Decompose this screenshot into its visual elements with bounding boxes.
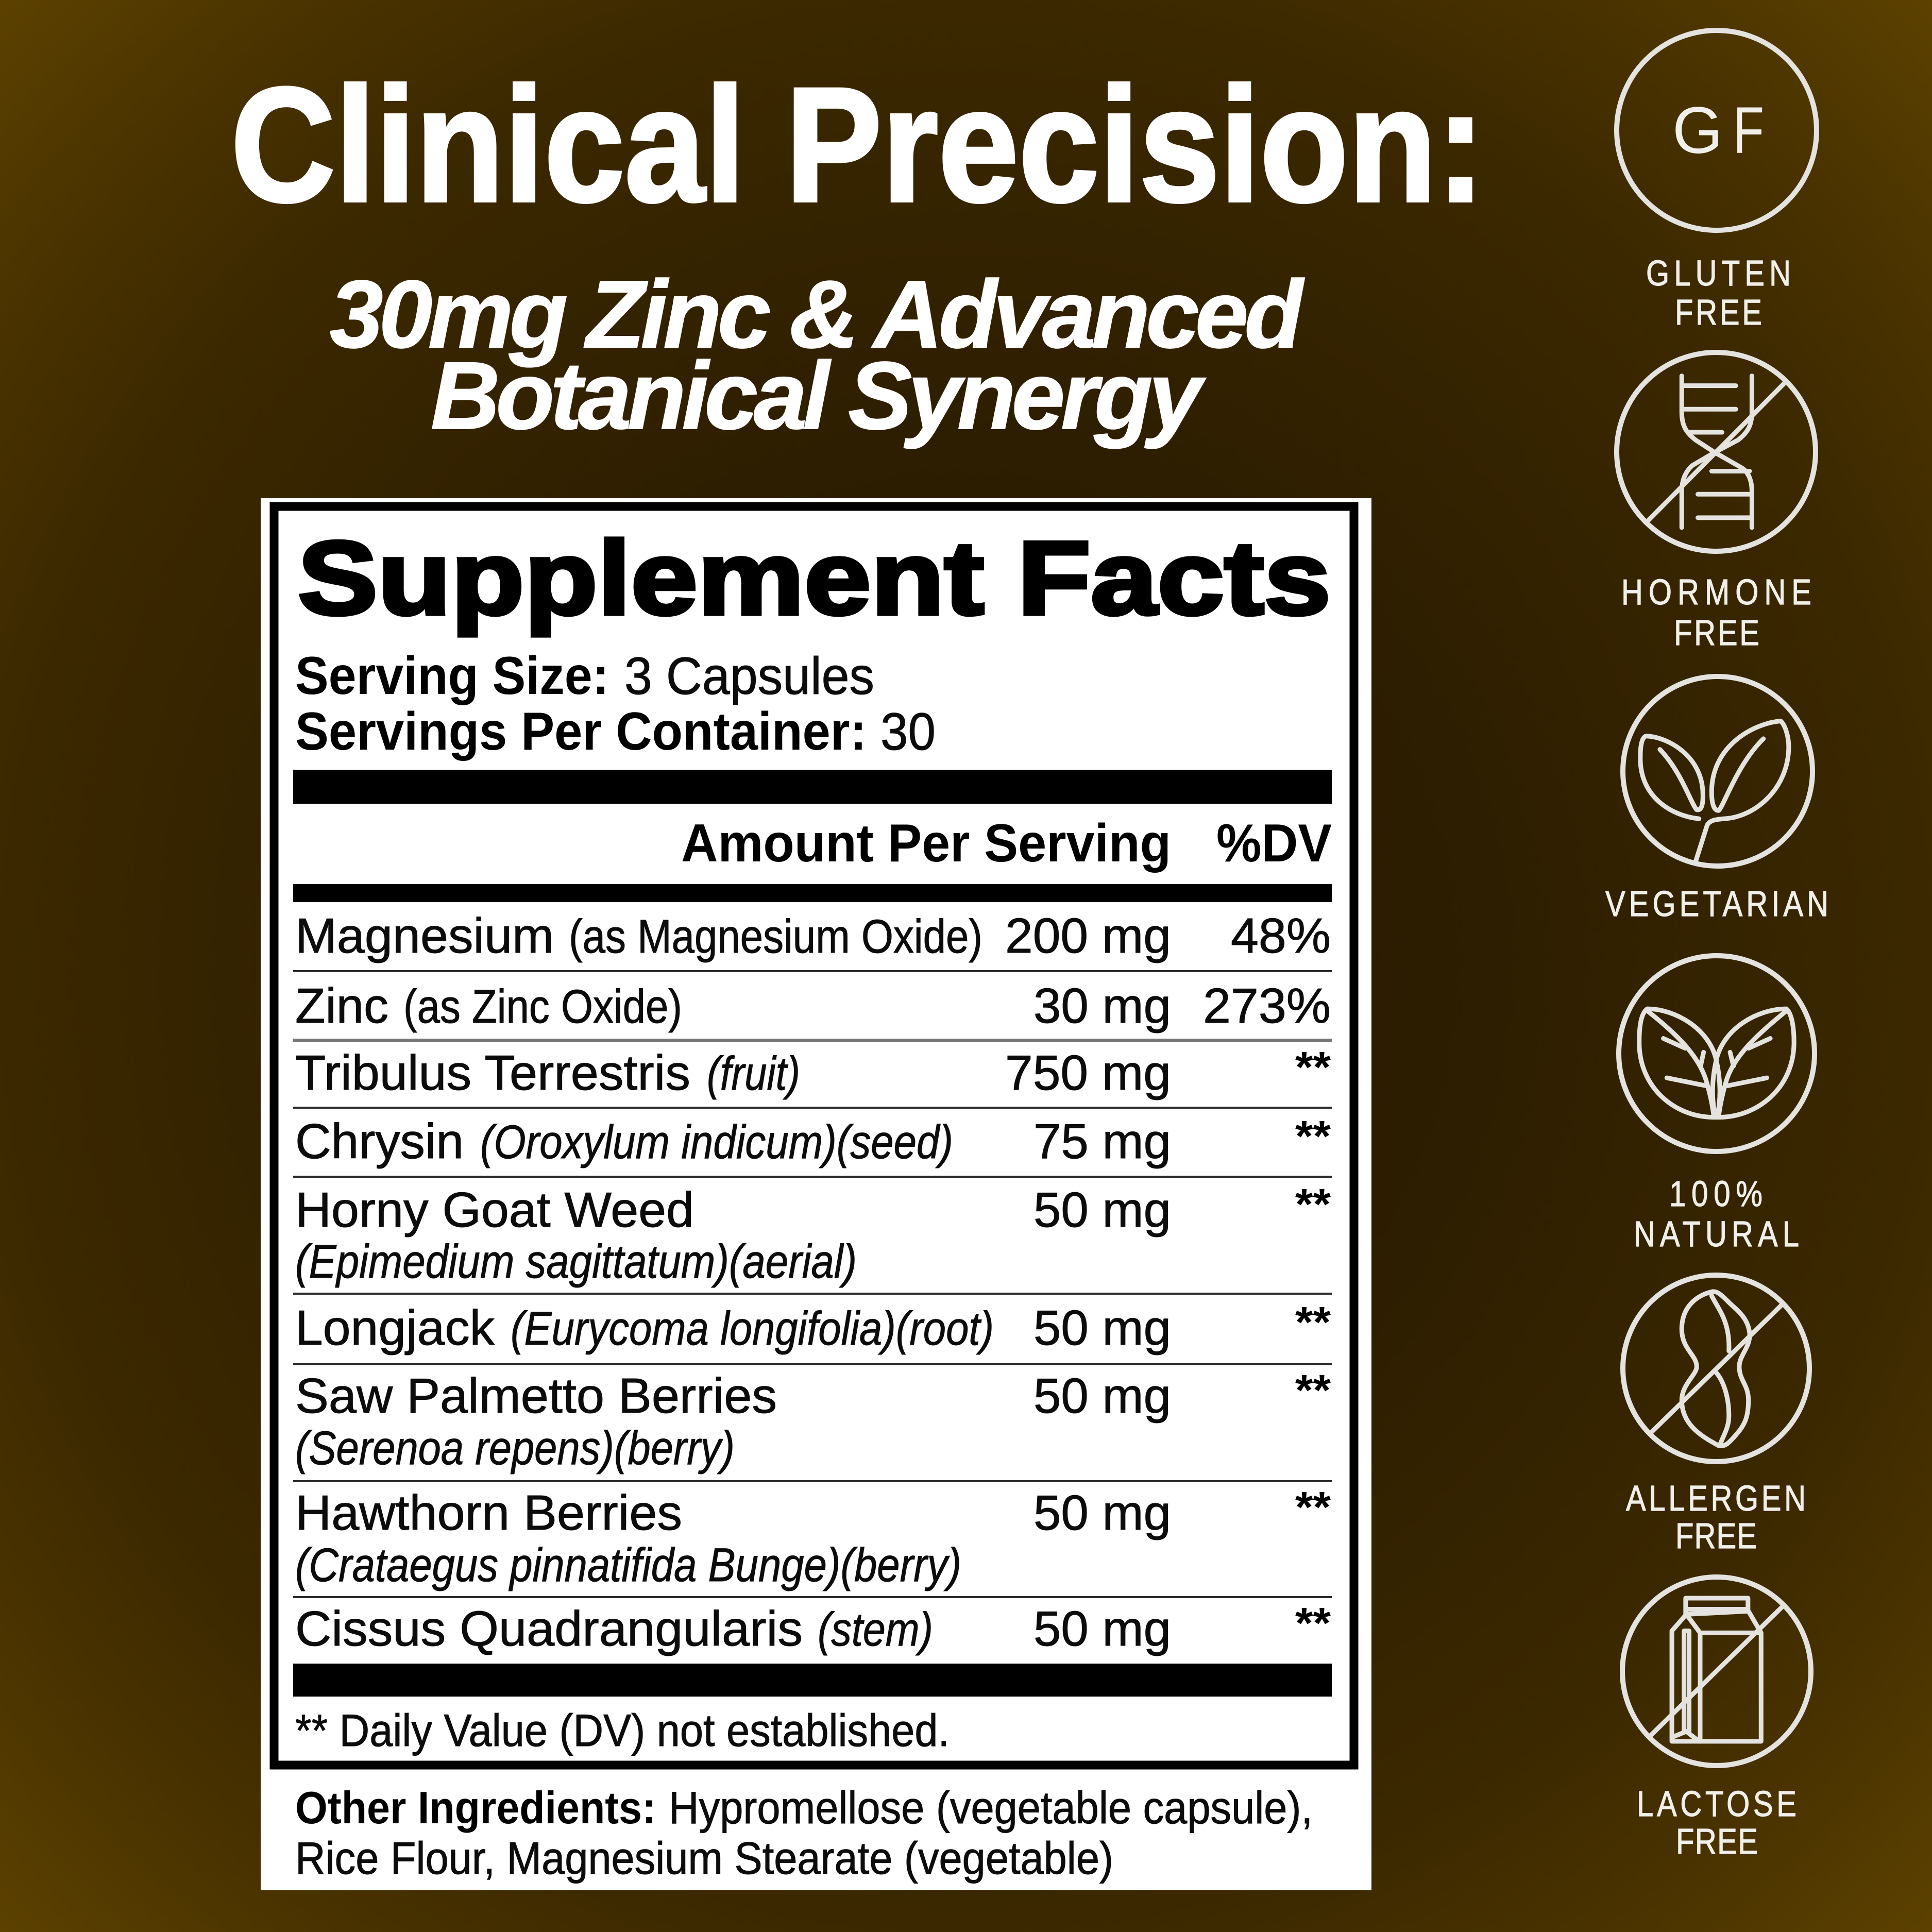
row: magnesium: 48% (1231, 908, 1331, 963)
badge: allergen free (1623, 1275, 1809, 1556)
bottom bar (293, 1664, 1332, 1697)
row: zinc: 273% (1203, 978, 1331, 1033)
label: lactose free: LACTOSE (1637, 1784, 1797, 1824)
row: longjack: Longjack (295, 1300, 495, 1355)
row: horny goat weed: 50 mg (1033, 1182, 1171, 1238)
row: hawthorn (295, 1483, 1331, 1591)
serving size (295, 646, 874, 706)
serving size: Serving Size: (295, 646, 609, 706)
row: hawthorn: (Crataegus pinnatifida Bunge)(berry) (295, 1539, 961, 1591)
row: zinc (295, 978, 1331, 1033)
label border (274, 506, 1354, 1765)
row: longjack (295, 1298, 1331, 1355)
row: chrysin (295, 1112, 1331, 1169)
subtitle: Botanical Synergy (431, 343, 1207, 449)
row: zinc: 30 mg (1033, 978, 1171, 1033)
row: magnesium: (as Magnesium Oxide) (569, 910, 982, 963)
label: allergen free: FREE (1675, 1516, 1757, 1556)
label: hormone free: FREE (1674, 613, 1759, 653)
row: longjack: (Eurycoma longifolia)(root) (511, 1302, 994, 1355)
column headers: %DV (1216, 814, 1332, 873)
heading: supplement facts: Supplement Facts (298, 520, 1331, 637)
other ingredients: Other Ingredients: (295, 1782, 656, 1833)
row: hawthorn: 50 mg (1033, 1485, 1171, 1540)
badge: lactose free (1622, 1577, 1811, 1861)
row: zinc: Zinc (295, 978, 388, 1033)
panel background (261, 498, 1371, 1890)
other ingredients: Hypromellose (vegetable capsule), (669, 1782, 1313, 1833)
icon: crossed peanut (1623, 1275, 1809, 1462)
row: tribulus: ** (1295, 1043, 1331, 1091)
label: allergen free (1626, 1478, 1806, 1556)
row: tribulus: (fruit) (707, 1047, 800, 1100)
row: hawthorn: ** (1295, 1483, 1331, 1531)
row: horny goat weed: Horny Goat Weed (295, 1182, 694, 1238)
icon: sprout (1623, 676, 1812, 866)
label: allergen free: ALLERGEN (1626, 1478, 1806, 1518)
row: longjack: ** (1295, 1298, 1331, 1346)
icon: GF circle: F (1733, 94, 1764, 167)
label: lactose free (1637, 1784, 1797, 1861)
badge: gluten free (1617, 30, 1817, 332)
row: hawthorn: Hawthorn Berries (295, 1485, 682, 1540)
panel: supplement facts (261, 498, 1371, 1890)
row: cissus: 50 mg (1033, 1601, 1171, 1656)
row: saw palmetto (295, 1366, 1331, 1475)
subtitle: 30mg Zinc & Advanced (330, 261, 1304, 368)
row: magnesium: 200 mg (1005, 908, 1171, 963)
row: chrysin: ** (1295, 1112, 1331, 1160)
other ingredients (295, 1782, 1313, 1884)
servings per container: 30 (880, 702, 936, 761)
label: 100% natural: NATURAL (1634, 1214, 1799, 1254)
row: cissus: Cissus Quadrangularis (295, 1601, 803, 1656)
row: zinc: (as Zinc Oxide) (403, 980, 682, 1033)
row: horny goat weed: (Epimedium sagittatum)(aerial) (295, 1235, 857, 1288)
row: saw palmetto: (Serenoa repens)(berry) (295, 1422, 735, 1475)
label: gluten free: GLUTEN (1646, 253, 1791, 293)
row: chrysin: Chrysin (295, 1114, 464, 1169)
footnote: ** Daily Value (DV) not established. (295, 1705, 950, 1756)
icon: GF circle: G (1672, 94, 1723, 167)
label: lactose free: FREE (1676, 1821, 1758, 1861)
row: horny goat weed (295, 1180, 1331, 1288)
row: cissus: ** (1295, 1599, 1331, 1647)
row: cissus: (stem) (818, 1603, 933, 1656)
icon: crossed milk carton (1622, 1577, 1811, 1766)
icon: crossed DNA (1617, 352, 1816, 551)
badge: hormone free (1617, 352, 1816, 653)
label: 100% natural: 100% (1669, 1174, 1762, 1214)
row: chrysin: 75 mg (1033, 1114, 1171, 1169)
header bar (293, 884, 1332, 902)
row: saw palmetto: ** (1295, 1366, 1331, 1414)
label: 100% natural (1634, 1174, 1799, 1254)
row: magnesium: Magnesium (295, 908, 554, 963)
row: magnesium (295, 908, 1331, 963)
row: cissus (295, 1599, 1331, 1656)
icon: double leaf (1619, 956, 1815, 1151)
row: tribulus: Tribulus Terrestris (295, 1045, 690, 1100)
row: tribulus: 750 mg (1005, 1045, 1171, 1100)
badge: vegetarian (1605, 676, 1828, 924)
subtitle (330, 261, 1304, 449)
label: hormone free: HORMONE (1621, 572, 1811, 612)
row: chrysin: (Oroxylum indicum)(seed) (480, 1116, 953, 1168)
icon: GF circle (1617, 30, 1817, 230)
row: saw palmetto: Saw Palmetto Berries (295, 1368, 777, 1423)
row: tribulus (295, 1043, 1331, 1100)
label: vegetarian: VEGETARIAN (1605, 884, 1828, 924)
title: Clinical Precision: (231, 54, 1485, 235)
row: saw palmetto: 50 mg (1033, 1368, 1171, 1423)
label: gluten free (1646, 253, 1791, 332)
servings per container: Servings Per Container: (295, 702, 867, 761)
label: hormone free (1621, 572, 1811, 653)
top bar (293, 770, 1332, 804)
badge: 100% natural (1619, 956, 1815, 1254)
row: horny goat weed: ** (1295, 1180, 1331, 1228)
row: longjack: 50 mg (1033, 1300, 1171, 1355)
serving size: 3 Capsules (624, 647, 874, 705)
column headers: Amount Per Serving (681, 814, 1171, 873)
other ingredients: Rice Flour, Magnesium Stearate (vegetable) (295, 1833, 1113, 1884)
label: gluten free: FREE (1675, 292, 1762, 332)
